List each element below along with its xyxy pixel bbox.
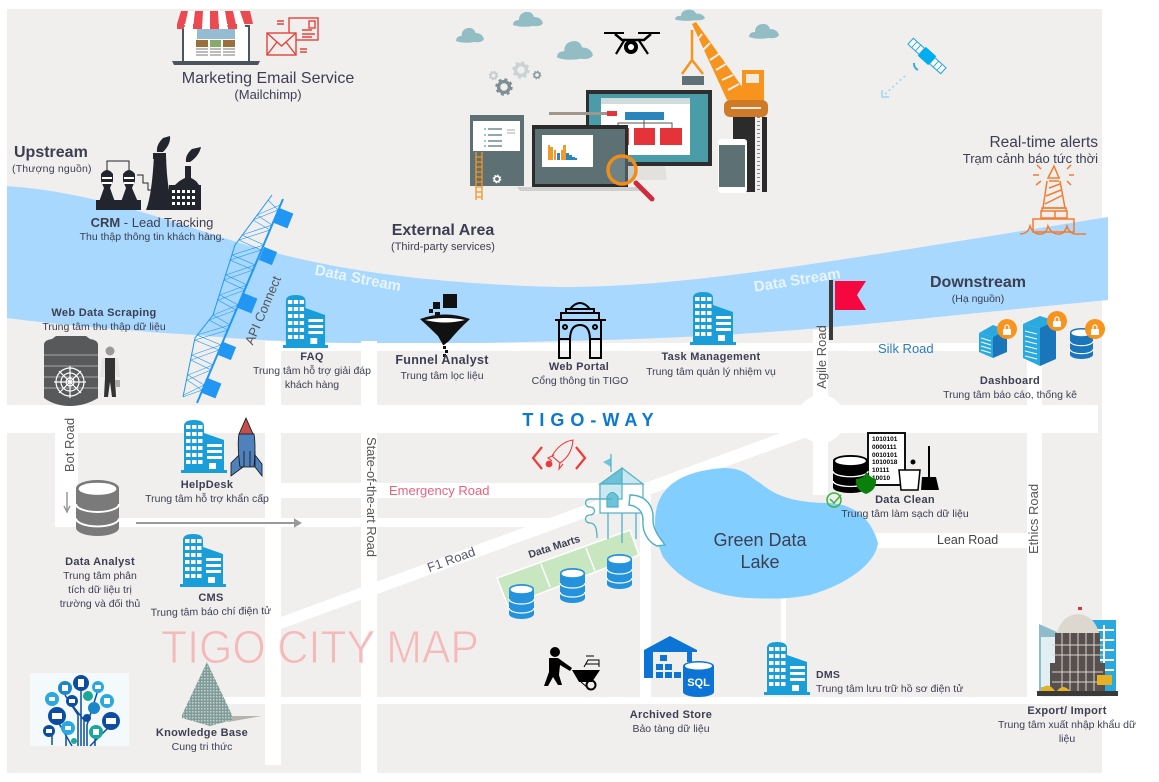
icon: web portal gate xyxy=(555,303,606,358)
icon: clouds xyxy=(456,10,779,60)
icon: technology tree xyxy=(30,673,129,746)
label: Export/Import xyxy=(998,705,1136,745)
icon: CMS building xyxy=(180,534,226,587)
icon: playhouse xyxy=(586,454,665,546)
label: Funnel Analyst: Trung tâm lọc liệu xyxy=(400,370,484,382)
label: DMS xyxy=(816,669,963,695)
label: Funnel Analyst: Funnel Analyst xyxy=(395,353,489,367)
road label: Agile Road: Agile Road xyxy=(814,325,829,389)
label: Data Analyst: trường và đối thủ xyxy=(60,598,140,610)
label: Dashboard: Dashboard xyxy=(980,375,1040,387)
label: Dashboard xyxy=(943,375,1077,401)
heading: TIGO-WAY: TIGO-WAY xyxy=(522,410,660,430)
arrow: down xyxy=(64,492,70,512)
icon: magnifier xyxy=(608,156,652,199)
icon: code rocket xyxy=(533,440,585,469)
label: Archived Store xyxy=(630,709,712,735)
label: Data Clean: Data Clean xyxy=(875,494,935,506)
label: Data Stream right: Data Stream xyxy=(753,265,842,296)
road label: Bot Road: Bot Road xyxy=(62,418,77,472)
label: CRM: CRM - Lead Tracking xyxy=(91,215,213,230)
road label: API Connect: API Connect xyxy=(242,273,284,347)
label: Web Portal xyxy=(532,361,628,387)
label: Funnel Analyst xyxy=(395,353,489,382)
heading: Downstream: Downstream xyxy=(930,274,1026,291)
label: Knowledge Base xyxy=(156,727,248,753)
label: Data Analyst xyxy=(60,556,140,610)
label: Data Analyst: tích dữ liệu trị xyxy=(68,584,132,596)
label: FAQ: Trung tâm hỗ trợ giải đáp xyxy=(253,364,371,377)
chart-like blob: Green Data Lake: Lake xyxy=(740,552,780,572)
label: FAQ xyxy=(253,351,371,391)
label: Dashboard: Trung tâm báo cáo, thống kê xyxy=(943,389,1077,401)
heading: Marketing Email Service xyxy=(182,70,354,102)
label: Web Data Scraping: Web Data Scraping xyxy=(51,307,157,319)
icon: crane xyxy=(682,22,768,192)
label: DMS: DMS xyxy=(816,669,840,681)
label: Data Analyst: Trung tâm phân xyxy=(63,570,137,582)
icon: data clean: 10111 xyxy=(872,467,890,474)
label: Archived Store: Bảo tàng dữ liệu xyxy=(632,723,710,735)
icon: Data Analyst database xyxy=(76,480,119,536)
label: CRM xyxy=(80,215,224,243)
road label: Ethics Road: Ethics Road xyxy=(1026,484,1041,554)
heading: Marketing Email Service: (Mailchimp) xyxy=(234,87,302,102)
label: Web Data Scraping xyxy=(42,307,166,333)
label: Export/Import: Trung tâm xuất nhập khẩu dữ xyxy=(998,719,1136,731)
label: Data Clean: Trung tâm làm sạch dữ liệu xyxy=(841,508,969,520)
road label: F1 Road: F1 Road xyxy=(425,544,477,575)
icon: export import building xyxy=(1037,607,1118,696)
icon: HelpDesk building xyxy=(181,420,227,473)
label: Export/Import: Export/ Import xyxy=(1027,705,1107,717)
heading: Downstream xyxy=(930,274,1026,305)
river: data stream xyxy=(7,186,1108,343)
label: Knowledge Base: Cung tri thức xyxy=(172,741,232,753)
label: Archived Store: Archived Store xyxy=(630,709,712,721)
icon: CRM factory xyxy=(96,136,201,210)
heading: Real-time alerts: Trạm cảnh báo tức thời xyxy=(963,151,1098,166)
label: CMS: Trung tâm báo chí điện tử xyxy=(151,605,271,619)
chart-like blob: Green Data Lake xyxy=(655,468,878,599)
road label: Lean Road: Lean Road xyxy=(937,533,998,547)
label: Task Management: Task Management xyxy=(661,351,761,363)
icon: funnel xyxy=(420,294,470,357)
icon: water tank with web xyxy=(44,336,98,406)
chart-like blob: Green Data Lake: Green Data xyxy=(713,530,808,550)
icon: desktop monitor xyxy=(549,90,712,180)
icon: data clean: 1010101 xyxy=(872,436,898,443)
icon: satellite xyxy=(882,37,947,97)
label: Export/Import: liệu xyxy=(1059,733,1075,745)
icon: data clean: 10010 xyxy=(872,475,890,482)
heading: Downstream: (Hạ nguồn) xyxy=(952,293,1004,305)
heading: Real-time alerts: Real-time alerts xyxy=(989,134,1098,151)
icon: archived store warehouse: SQL xyxy=(687,677,710,689)
icon: Task Management building xyxy=(690,292,736,345)
icon: marketing store laptop xyxy=(172,11,260,65)
label: CRM: Thu thập thông tin khách hàng. xyxy=(80,231,224,243)
icon: data clean: 1010018 xyxy=(872,459,898,466)
heading: Upstream: Upstream xyxy=(14,144,88,161)
label: FAQ: khách hàng xyxy=(285,379,339,391)
label: HelpDesk: HelpDesk xyxy=(181,479,234,491)
label: Task Management xyxy=(646,351,776,378)
label: Web Portal: Cổng thông tin TIGO xyxy=(532,375,628,387)
title: TIGO CITY MAP: TIGO CITY MAP xyxy=(161,621,479,673)
heading: Upstream xyxy=(12,144,92,175)
label: FAQ: FAQ xyxy=(300,351,324,363)
icon: data mart databases xyxy=(509,554,632,619)
icon: archived store warehouse xyxy=(644,636,714,697)
icon: worker xyxy=(100,346,120,397)
label: CMS: CMS xyxy=(198,592,224,604)
heading: Real-time alerts xyxy=(963,134,1098,166)
heading: External Area: (Third-party services) xyxy=(391,241,495,253)
icon: knowledge pyramid xyxy=(182,662,262,726)
label: DMS: Trung tâm lưu trữ hồ sơ điện tử xyxy=(816,683,963,695)
label: Web Portal: Web Portal xyxy=(549,361,609,373)
panel: Data Marts band: Data Marts xyxy=(527,533,582,561)
heading: Marketing Email Service: Marketing Email Service xyxy=(182,70,354,87)
panel: Data Marts band xyxy=(497,530,639,606)
label: Web Data Scraping: Trung tâm thu thập dữ liệu xyxy=(42,321,166,333)
icon: flag xyxy=(829,280,866,340)
icon: FAQ building xyxy=(283,295,328,348)
road label: Silk Road: Silk Road xyxy=(878,341,934,356)
icon: data clean xyxy=(827,433,939,507)
road label: State-of-the-art Road: State-of-the-art Road xyxy=(364,437,379,557)
icon: email envelopes xyxy=(267,18,318,55)
icon: data clean: 0010101 xyxy=(872,452,898,459)
heading: External Area xyxy=(391,222,495,253)
label: Data Clean xyxy=(841,494,969,520)
label: Data Analyst: Data Analyst xyxy=(65,556,135,568)
icon: data clean: 0000111 xyxy=(872,444,897,451)
road network xyxy=(7,330,1102,773)
label: HelpDesk xyxy=(145,479,269,505)
icon: DMS building xyxy=(764,642,810,695)
icon: wheelbarrow worker xyxy=(544,647,600,690)
label: Task Management: Trung tâm quản lý nhiệm vụ xyxy=(646,366,776,378)
icon: API bridge xyxy=(183,195,293,403)
icon: checklist tablet xyxy=(470,115,524,200)
heading: Upstream: (Thượng nguồn) xyxy=(12,163,92,175)
road label: Emergency Road: Emergency Road xyxy=(389,483,489,498)
arrow: right xyxy=(136,520,300,526)
icon: drone xyxy=(604,33,660,54)
label: CMS xyxy=(151,592,271,619)
label: Knowledge Base: Knowledge Base xyxy=(156,727,248,739)
icon: analytics laptop xyxy=(517,125,640,191)
label: HelpDesk: Trung tâm hỗ trợ khẩn cấp xyxy=(145,492,269,505)
icon: rocket xyxy=(231,418,262,476)
label: Data Stream left: Data Stream xyxy=(313,262,402,295)
icon: dashboard servers xyxy=(979,311,1105,366)
heading: External Area: External Area xyxy=(392,222,494,239)
icon: phone xyxy=(718,139,747,193)
icon: gears xyxy=(489,62,541,94)
icon: lighthouse xyxy=(1020,165,1086,234)
